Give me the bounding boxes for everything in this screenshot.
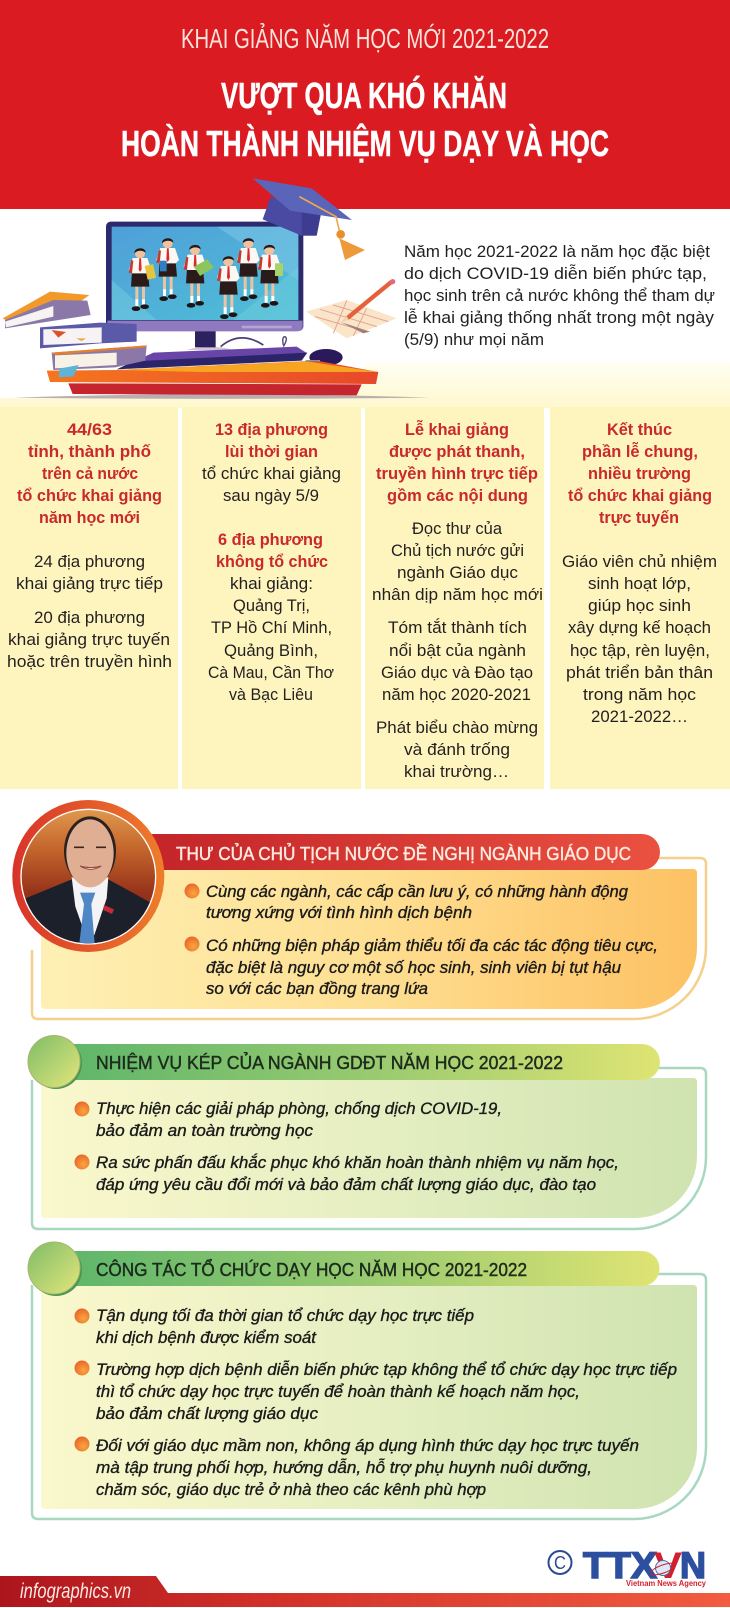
- column 3 body: Phát biểu chào mừng: [376, 719, 538, 737]
- column 3 body: và đánh trống: [404, 741, 510, 759]
- icon: monitor with students: [106, 222, 303, 350]
- panel: teaching organization: [28, 1242, 706, 1519]
- column 3 heading: truyền hình trực tiếp: [376, 465, 538, 483]
- logo: TTXVN: N: [680, 1544, 706, 1586]
- column 2 first block: [202, 421, 341, 505]
- column 3 body: nhân dịp năm học mới: [372, 586, 543, 604]
- floor background glow: [0, 362, 730, 408]
- header band: [0, 0, 730, 209]
- column 4 body: [562, 553, 717, 726]
- panel: column 1: [0, 407, 178, 789]
- panel heading: CÔNG TÁC TỔ CHỨC DẠY HỌC NĂM HỌC 2021-2022: [96, 1259, 527, 1280]
- bullet 3: [74, 1436, 639, 1499]
- column 2 second block: không tổ chức: [216, 553, 328, 571]
- intro paragraph: lễ khai giảng thống nhất trong một ngày: [404, 308, 715, 327]
- panel: column 4: [550, 407, 730, 789]
- panel heading: [54, 1044, 660, 1080]
- icon: desk: [47, 361, 378, 395]
- bullet 1: [74, 1307, 474, 1347]
- column 2 first block: 13 địa phương: [215, 421, 328, 439]
- bullet 2: Trường hợp dịch bệnh diễn biến phức tạp không thể tổ chức dạy học trực tiếp: [96, 1360, 677, 1379]
- bullet 2: [74, 1360, 677, 1423]
- column 2 first block: tổ chức khai giảng: [202, 465, 341, 483]
- bullet 2: bảo đảm chất lượng giáo dục: [96, 1405, 319, 1423]
- bullet 2: so với các bạn đồng trang lứa: [206, 980, 428, 998]
- panel heading: [88, 834, 660, 870]
- icon: green circle: [28, 1242, 82, 1296]
- column 3 body: khai trường…: [404, 763, 509, 781]
- column 2 first block: lùi thời gian: [225, 443, 318, 461]
- bullet 3: Đối với giáo dục mầm non, không áp dụng hình thức dạy học trực tuyến: [96, 1437, 639, 1455]
- bullet 2: thì tổ chức dạy học trực tuyến để hoàn thành kế hoạch năm học,: [96, 1383, 580, 1401]
- panel: president's letter: [12, 800, 706, 1019]
- bullet 2: [74, 1153, 619, 1194]
- column 4 body: trong năm học: [583, 686, 696, 704]
- column 4 heading: trực tuyến: [599, 509, 679, 527]
- column 2 second block: Quảng Trị,: [233, 597, 310, 615]
- column 2 second block: khai giảng:: [230, 575, 313, 593]
- column 3 body: năm học 2020-2021: [382, 686, 531, 704]
- column 1 body: [7, 553, 172, 671]
- column 1 heading: [17, 421, 162, 527]
- icon: graduation cap: [253, 178, 365, 260]
- floor shadow: [13, 394, 430, 399]
- logo: TTXVN: [548, 1544, 706, 1588]
- panel: dual task: [28, 1036, 706, 1229]
- column 4 body: học tập, rèn luyện,: [570, 642, 710, 660]
- column 3 body: [372, 520, 543, 781]
- logo: TTXVN: TTX: [583, 1544, 657, 1586]
- bullet 1: bảo đảm an toàn trường học: [96, 1122, 314, 1140]
- column 3 body: Đọc thư của: [412, 520, 503, 538]
- column 4 body: giúp học sinh: [588, 597, 691, 615]
- intro paragraph: [404, 243, 715, 349]
- column 1 body: khai giảng trực tiếp: [16, 575, 163, 593]
- subtitle: KHAI GIẢNG NĂM HỌC MỚI 2021-2022: [181, 22, 549, 54]
- bullet 2: Ra sức phấn đấu khắc phục khó khăn hoàn thành nhiệm vụ năm học,: [96, 1153, 619, 1172]
- column 1 heading: tỉnh, thành phố: [28, 443, 151, 461]
- copyright mark: [548, 1551, 572, 1574]
- bullet 3: chăm sóc, giáo dục trẻ ở nhà theo các kênh phù hợp: [96, 1481, 486, 1499]
- column 1 heading: trên cả nước: [42, 465, 138, 483]
- copyright mark: C: [554, 1553, 566, 1573]
- bullet 1: Thực hiện các giải pháp phòng, chống dịch COVID-19,: [96, 1100, 502, 1118]
- bullet 1: khi dịch bệnh được kiểm soát: [96, 1329, 317, 1347]
- bullet 1: Cùng các ngành, các cấp cần lưu ý, có những hành động: [206, 883, 629, 901]
- column 1 heading: năm học mới: [39, 509, 140, 527]
- panel heading: THƯ CỦA CHỦ TỊCH NƯỚC ĐỀ NGHỊ NGÀNH GIÁO DỤC: [176, 843, 631, 864]
- column 4 heading: Kết thúc: [607, 421, 672, 439]
- column 3 body: Tóm tắt thành tích: [388, 618, 527, 637]
- column 3 heading: được phát thanh,: [389, 443, 525, 461]
- column 4 body: sinh hoạt lớp,: [588, 575, 691, 593]
- icon: green circle: [28, 1036, 82, 1089]
- column 1 heading: 44/63: [67, 421, 112, 439]
- column 2 second block: 6 địa phương: [218, 531, 323, 549]
- column 4 body: xây dựng kế hoạch: [568, 619, 711, 637]
- column 2 first block: sau ngày 5/9: [223, 487, 319, 505]
- column 4 body: Giáo viên chủ nhiệm: [562, 553, 717, 571]
- column 2 second block: Quảng Bình,: [224, 642, 318, 660]
- column 4 heading: tổ chức khai giảng: [568, 487, 712, 505]
- column 3 heading: gồm các nội dung: [387, 487, 528, 505]
- panel: column 3: [365, 407, 544, 789]
- column 4 body: 2021-2022…: [591, 708, 688, 726]
- bullet 1: Tận dụng tối đa thời gian tổ chức dạy học trực tiếp: [96, 1307, 474, 1325]
- portrait: [12, 800, 164, 952]
- intro paragraph: Năm học 2021-2022 là năm học đặc biệt: [404, 243, 710, 261]
- column 1 body: 24 địa phương: [34, 553, 145, 571]
- main title: [121, 74, 609, 164]
- column 4 heading: [568, 421, 712, 527]
- bullet 2: đáp ứng yêu cầu đổi mới và bảo đảm chất lượng giáo dục, đào tạo: [96, 1176, 596, 1194]
- panel: column 2: [182, 407, 361, 789]
- column 3 heading: Lễ khai giảng: [405, 420, 509, 439]
- icon: paper and pencil: [306, 279, 397, 338]
- column 2 second block: và Bạc Liêu: [229, 686, 313, 704]
- column 1 heading: tổ chức khai giảng: [17, 487, 162, 505]
- logo: TTXVN: V: [654, 1544, 682, 1586]
- column 3 body: ngành Giáo dục: [397, 564, 518, 582]
- icon: stack of books: [3, 292, 147, 377]
- bullet 2: đặc biệt là nguy cơ một số học sinh, sinh viên bị tụt hậu: [206, 959, 621, 977]
- bullet 1: [184, 883, 629, 922]
- column 3 body: nổi bật của ngành: [389, 642, 526, 660]
- website label: infographics.vn: [20, 1580, 131, 1603]
- column 2 second block: Cà Mau, Cần Thơ: [208, 664, 334, 682]
- column 2 second block: TP Hồ Chí Minh,: [211, 619, 332, 637]
- footer bar: [0, 1576, 730, 1607]
- logo: TTXVN: Vietnam News Agency: [626, 1578, 706, 1588]
- bullet 2: Có những biện pháp giảm thiểu tối đa các tác động tiêu cực,: [206, 937, 658, 955]
- column 3 body: Giáo dục và Đào tạo: [381, 664, 533, 682]
- column 2 second block: [208, 531, 334, 704]
- bullet 2: [184, 936, 658, 998]
- column 4 heading: nhiều trường: [588, 465, 691, 483]
- intro paragraph: do dịch COVID-19 diễn biến phức tạp,: [404, 264, 707, 283]
- column 3 body: Chủ tịch nước gửi: [391, 542, 524, 560]
- column 1 body: hoặc trên truyền hình: [7, 653, 172, 671]
- intro paragraph: học sinh trên cả nước không thể tham dự: [404, 287, 715, 305]
- column 4 heading: phần lễ chung,: [582, 442, 698, 461]
- icon: keyboard and mouse: [117, 337, 343, 369]
- main title: VƯỢT QUA KHÓ KHĂN: [221, 74, 507, 116]
- column 4 body: phát triển bản thân: [566, 664, 713, 682]
- panel heading: NHIỆM VỤ KÉP CỦA NGÀNH GDĐT NĂM HỌC 2021-2022: [96, 1052, 563, 1073]
- bullet 1: [74, 1100, 502, 1140]
- column 3 heading: [376, 420, 538, 505]
- column 1 body: 20 địa phương: [34, 609, 145, 627]
- bullet 1: tương xứng với tình hình dịch bệnh: [206, 904, 472, 922]
- illustration: computer, books, cap and pencil: [3, 178, 430, 399]
- intro paragraph: (5/9) như mọi năm: [404, 331, 544, 349]
- panel heading: [54, 1251, 660, 1286]
- bullet 3: mà tập trung phối hợp, hướng dẫn, hỗ trợ phụ huynh nuôi dưỡng,: [96, 1458, 592, 1477]
- column 1 body: khai giảng trực tuyến: [8, 631, 170, 649]
